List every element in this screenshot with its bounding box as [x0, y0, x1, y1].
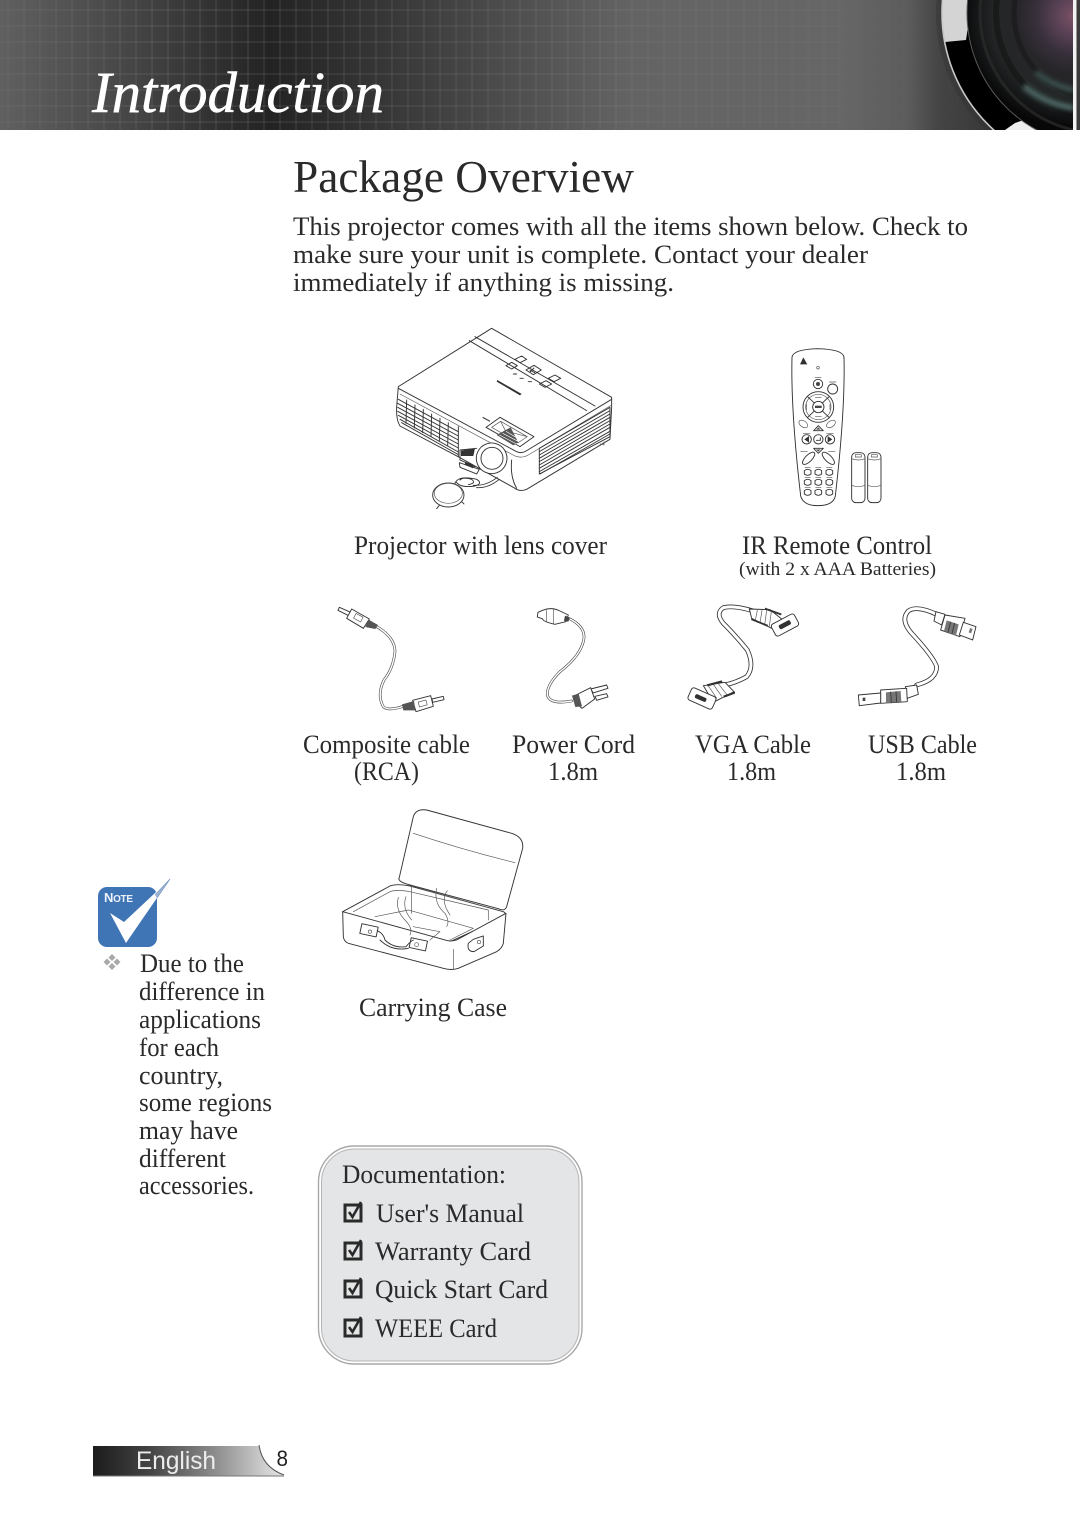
- note text: may have: [139, 1116, 238, 1145]
- documentation heading: Documentation:: [342, 1160, 506, 1189]
- language label: English: [136, 1447, 216, 1475]
- icon: power cord: [537, 609, 608, 708]
- icon: projector lens photograph: [936, 0, 1073, 130]
- white strip at right of banner: [1073, 0, 1076, 130]
- lens cover and strap: [433, 477, 499, 509]
- caption: VGA cable: [695, 730, 811, 786]
- note text: [139, 949, 272, 1200]
- caption: USB cable: 1.8m: [896, 757, 946, 786]
- caption: power cord: [512, 730, 635, 786]
- caption: remote: (with 2 x AAA Batteries): [739, 560, 936, 580]
- header banner: [0, 0, 1080, 130]
- panel: documentation: [318, 1146, 582, 1364]
- checklist item: warranty card: Warranty Card: [375, 1237, 531, 1266]
- caption: remote: IR Remote Control: [742, 531, 932, 560]
- caption: projector: Projector with lens cover: [354, 531, 607, 560]
- icon: USB cable: [858, 609, 976, 706]
- note text: accessories.: [139, 1171, 254, 1200]
- caption: carrying case: Carrying Case: [359, 993, 507, 1022]
- caption: power cord: Power Cord: [512, 730, 635, 759]
- caption: VGA cable: 1.8m: [727, 757, 776, 786]
- case handle and latches: [360, 924, 483, 952]
- note text: different: [139, 1144, 227, 1173]
- icon: note bullet: [104, 954, 120, 970]
- caption: composite cable: Composite cable: [303, 730, 470, 759]
- page number: 8: [276, 1446, 288, 1471]
- note text: Due to the: [140, 949, 244, 978]
- caption: composite cable: (RCA): [354, 757, 419, 786]
- icon: IR remote control with batteries: [792, 349, 881, 506]
- intro paragraph: make sure your unit is complete. Contact your dealer: [293, 240, 868, 269]
- intro paragraph: This projector comes with all the items shown below. Check to: [293, 212, 968, 241]
- caption: USB cable: USB Cable: [868, 730, 977, 759]
- caption: power cord: 1.8m: [548, 757, 598, 786]
- note text: for each: [139, 1033, 219, 1062]
- note text: applications: [139, 1005, 261, 1034]
- intro paragraph: [293, 212, 968, 297]
- icon: VGA cable: [687, 607, 800, 710]
- icon: note badge: [98, 879, 170, 947]
- checklist item: user's manual: User's Manual: [376, 1199, 524, 1228]
- batteries: [852, 453, 881, 503]
- heading: Package Overview: Package Overview: [293, 152, 634, 202]
- top control buttons: [483, 356, 561, 421]
- checklist item: quick start card: Quick Start Card: [375, 1275, 548, 1304]
- caption: remote: [739, 531, 936, 580]
- intro paragraph: immediately if anything is missing.: [293, 268, 674, 297]
- icon: projector with lens cover: [397, 328, 612, 509]
- note text: country,: [139, 1061, 223, 1090]
- left vents: [398, 399, 458, 457]
- note text: some regions: [139, 1088, 272, 1117]
- note label: NOTE: [104, 890, 133, 905]
- checklist item: WEEE card: WEEE Card: [375, 1314, 497, 1343]
- remote buttons: [798, 377, 838, 495]
- lens hatch window: [486, 417, 534, 447]
- caption: VGA cable: VGA Cable: [695, 730, 811, 759]
- chapter title: Introduction: [91, 60, 384, 125]
- caption: composite cable: [303, 730, 470, 786]
- note text: difference in: [139, 977, 265, 1006]
- right vents: [539, 407, 610, 474]
- footer language tab: [93, 1445, 288, 1476]
- icon: carrying case: [343, 810, 523, 969]
- caption: USB cable: [868, 730, 977, 786]
- icon: composite cable: [338, 607, 444, 712]
- lens: [459, 439, 511, 478]
